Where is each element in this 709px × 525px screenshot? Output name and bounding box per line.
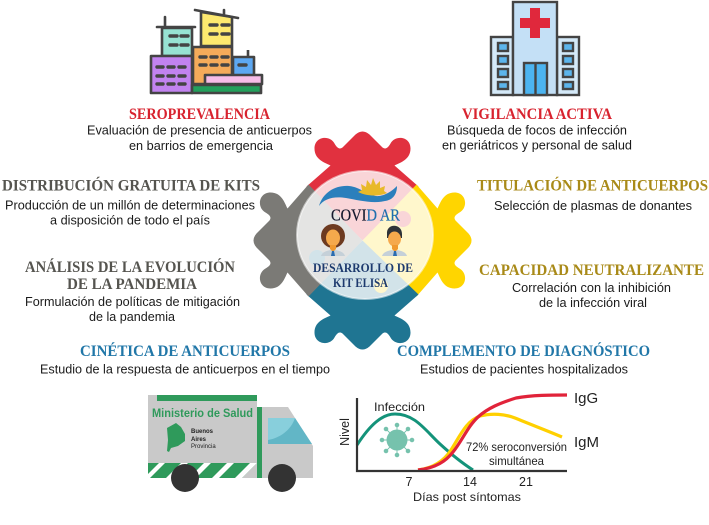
truck cab: [262, 407, 313, 478]
icon: virus: [380, 423, 414, 457]
truck province text: Buenos: [191, 429, 214, 435]
chart labels: 7: [406, 475, 413, 489]
logo: blue wave: [319, 186, 397, 206]
chart labels: 72% seroconversión: [466, 440, 567, 454]
logo: covidar wordmark: COVID AR: [331, 206, 400, 224]
text: vigilancia description: Búsqueda de focos de infección: [447, 122, 627, 138]
icon: province map: [167, 423, 185, 452]
chart labels: Infección: [374, 400, 425, 414]
text: desarrollo de kit elisa: KIT ELISA: [333, 275, 388, 290]
heading: capacidad neutralizante: CAPACIDAD NEUTRALIZANTE: [479, 262, 704, 279]
chart labels: Días post síntomas: [413, 490, 521, 504]
text: titulacion description: Selección de plasmas de donantes: [494, 198, 692, 213]
truck province text: Provincia: [191, 444, 216, 450]
puzzle piece: teal: [306, 240, 418, 350]
text: analisis description: Formulación de políticas de mitigación: [25, 294, 240, 309]
text: capacidad description: [512, 280, 671, 310]
chart labels: 14: [463, 475, 477, 489]
wheels: [171, 464, 296, 492]
text: vigilancia description: en geriátricos y personal de salud: [442, 138, 632, 152]
heading: analisis: DE LA PANDEMIA: [67, 276, 198, 293]
chart labels: simultánea: [489, 454, 544, 468]
text: seroprevalencia description: Evaluación de presencia de anticuerpos: [87, 122, 312, 138]
puzzle piece: grey: [254, 184, 362, 296]
text: seroprevalencia description: en barrios de emergencia: [129, 138, 274, 153]
chart: antibody levels: [338, 390, 599, 504]
curve: IgM: [418, 414, 562, 470]
icon: hospital: [491, 2, 579, 95]
truck label: Ministerio de Salud: [152, 408, 253, 420]
text: complemento description: Estudios de pacientes hospitalizados: [420, 362, 628, 376]
text: distribucion description: a disposición de todo el país: [50, 212, 210, 228]
text: capacidad description: de la infección viral: [539, 295, 647, 310]
truck cargo box: [148, 395, 257, 478]
chart labels: 21: [519, 475, 533, 489]
puzzle interlock lobes: [309, 211, 411, 293]
heading: complemento: COMPLEMENTO DE DIAGNÓSTICO: [397, 343, 650, 360]
truck window: [268, 418, 312, 444]
text: capacidad description: Correlación con la inhibición: [512, 280, 671, 295]
text: cinetica description: Estudio de la respuesta de anticuerpos en el tiempo: [40, 362, 330, 376]
center circle: [297, 171, 433, 299]
heading: analisis: [25, 259, 235, 293]
heading: cinetica: CINÉTICA DE ANTICUERPOS: [80, 343, 290, 360]
puzzle diagram: [254, 132, 472, 350]
chart labels: Nivel: [338, 418, 352, 446]
chart labels: IgG: [574, 390, 598, 407]
icon: man doctor: [382, 226, 407, 256]
heading: seroprevalencia: SEROPREVALENCIA: [129, 106, 271, 123]
text: vigilancia description: [442, 122, 632, 152]
puzzle piece: red: [306, 132, 418, 240]
icon: woman doctor: [321, 224, 345, 256]
chart labels: IgM: [574, 434, 599, 451]
text: analisis description: de la pandemia: [89, 309, 176, 324]
chart axes: [357, 398, 567, 471]
truck: [148, 395, 313, 492]
logo: sun: [358, 178, 387, 196]
curve: infection: [357, 414, 473, 470]
icon: city buildings: [151, 10, 262, 93]
curve: IgG: [418, 395, 567, 470]
text: analisis description: [25, 294, 240, 324]
heading: distribucion gratuita: DISTRIBUCIÓN GRATUITA DE KITS: [2, 178, 260, 194]
heading: vigilancia activa: VIGILANCIA ACTIVA: [462, 106, 613, 123]
text: desarrollo de kit elisa: DESARROLLO DE: [313, 260, 413, 275]
truck province text: [191, 429, 216, 450]
text: desarrollo de kit elisa: [313, 260, 413, 290]
truck stripes: [148, 463, 257, 478]
chart labels: [338, 390, 599, 504]
puzzle piece: yellow: [362, 184, 472, 296]
heading: analisis: ANÁLISIS DE LA EVOLUCIÓN: [25, 259, 235, 276]
text: seroprevalencia description: [87, 122, 312, 153]
truck province text: Aires: [191, 437, 207, 443]
text: distribucion description: Producción de un millón de determinaciones: [5, 198, 255, 212]
text: distribucion description: [5, 198, 255, 228]
